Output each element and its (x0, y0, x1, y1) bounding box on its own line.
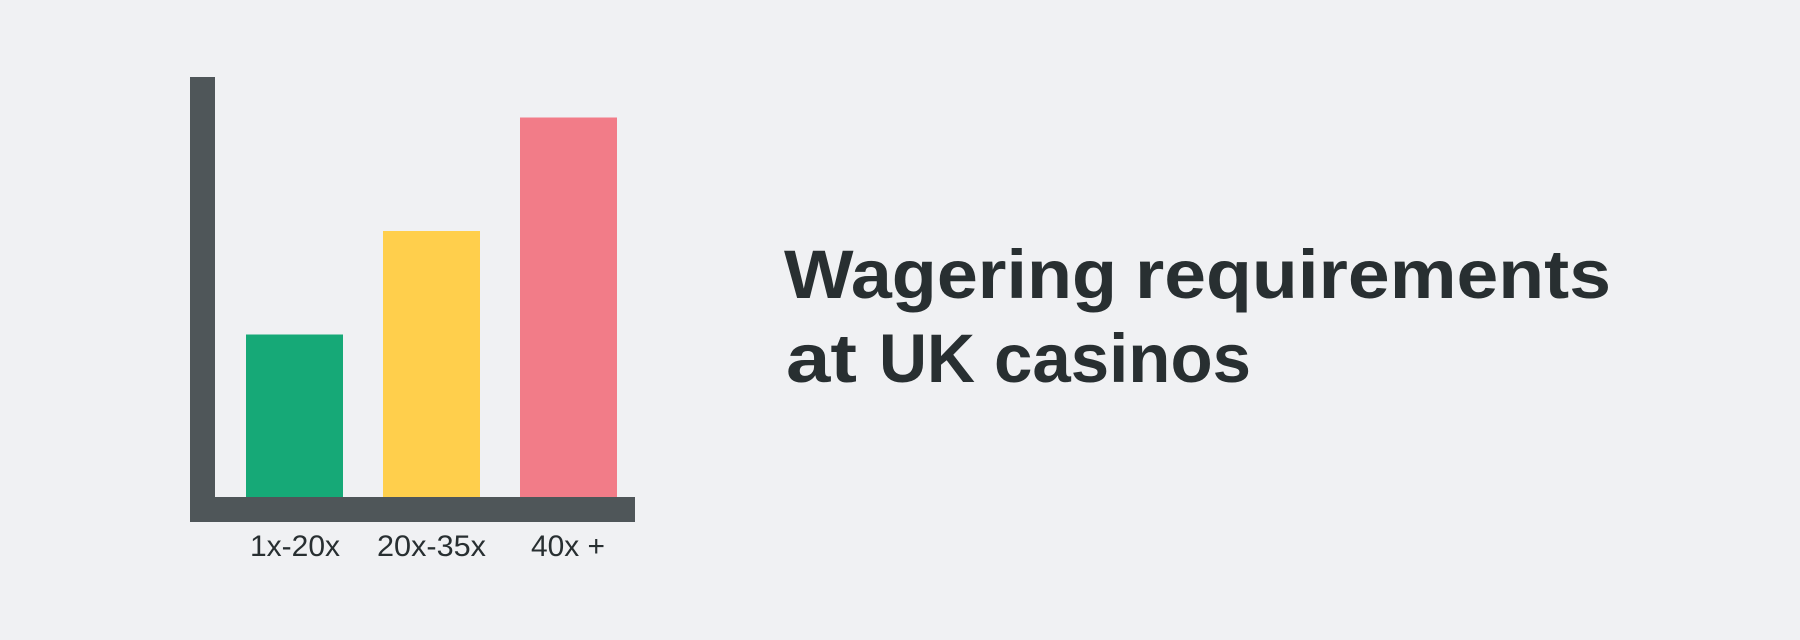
title line 1: requirements (1135, 236, 1611, 313)
bar: 40x + (520, 118, 617, 497)
label: 1x-20x: 1x-20x (250, 530, 340, 563)
title line 1 (784, 236, 1611, 313)
title line 2 (786, 320, 1251, 397)
title line 2: UK (879, 320, 975, 397)
label: 40x +: 40x + (531, 530, 605, 563)
bar: 20x-35x (383, 231, 480, 497)
title line 2: casinos (994, 320, 1251, 397)
title line 2: at (786, 320, 857, 397)
title (784, 236, 1611, 397)
title line 1: Wagering (784, 236, 1117, 313)
chart axes (190, 77, 635, 522)
label: 20x-35x: 20x-35x (377, 530, 486, 563)
bar: 1x-20x (246, 334, 343, 497)
bar chart (190, 77, 635, 563)
